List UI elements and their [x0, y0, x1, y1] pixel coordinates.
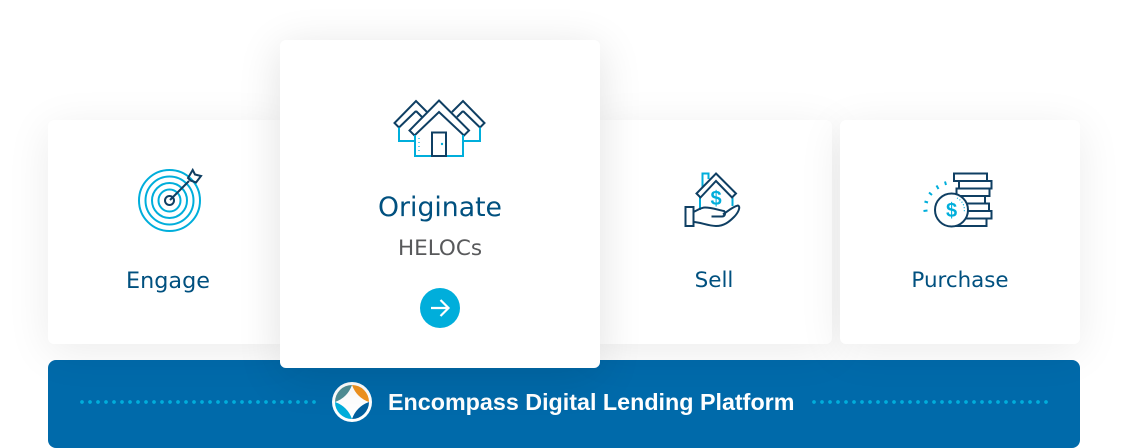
subheading: HELOCs: HELOCs [398, 236, 482, 261]
card: Engage [48, 120, 288, 344]
icon: target with arrow [138, 168, 203, 232]
card: Originate [280, 40, 600, 368]
icon: houses [393, 99, 486, 157]
icon: house in hand [684, 172, 740, 227]
icon: coins stack [923, 172, 992, 228]
label: Engage: Engage [126, 268, 210, 294]
label: Sell: Sell [695, 268, 733, 293]
icon: arrow button [420, 288, 460, 328]
label: Purchase: Purchase [911, 268, 1009, 293]
card: Sell [592, 120, 832, 344]
icon: platform logo [332, 382, 372, 422]
icon: coins stack: $ [946, 200, 957, 222]
platform name: Encompass Digital Lending Platform [388, 389, 794, 415]
left dotted line [80, 400, 316, 404]
heading: Originate: Originate [378, 192, 502, 223]
card: Purchase [840, 120, 1080, 344]
icon: house in hand: $ [710, 188, 722, 210]
platform bar [48, 360, 1080, 448]
right dotted line [812, 400, 1048, 404]
